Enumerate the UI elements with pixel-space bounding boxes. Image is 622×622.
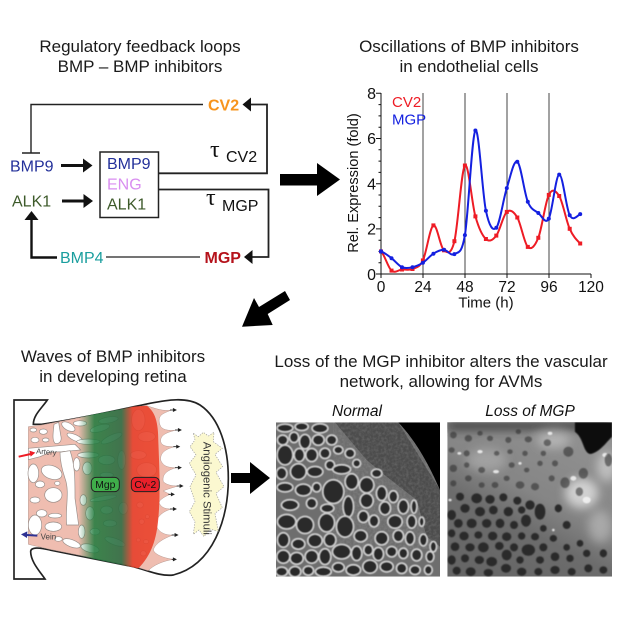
title: loss of MGP: network, allowing for AVMs [340,372,542,391]
label: Mgp [91,477,119,492]
x tick labels: 48 [456,279,474,296]
label: Vein: Vein [41,533,56,542]
arrow: BMP4 to ALK1 [24,211,57,258]
x tick labels: 24 [414,279,432,296]
series: MGP [379,128,582,269]
label: tau MGP: τ [206,185,216,211]
arrow: big right to chart [280,163,340,196]
y tick labels: 0 [367,267,376,284]
legend: CV2: CV2 [392,94,421,111]
title: waves of BMP inhibitors: in developing retina [39,367,187,386]
micrograph: loss of MGP vasculature [447,422,617,577]
line MGP to BMP4 [106,256,200,258]
arrow: retina to micrographs [231,462,270,494]
x tick labels: 120 [578,279,604,296]
label: tau MGP [206,185,258,215]
sprout arrows [168,409,183,561]
Mgp and Cv-2 expression gradient [77,403,162,573]
title: regulatory feedback loops: Regulatory feedback loops [39,37,241,56]
heading: Normal: Normal [332,403,383,420]
micrograph: normal vasculature [276,422,440,577]
x tick labels [377,279,604,296]
label: tau CV2: τ [210,137,220,163]
label: ALK1: ALK1 [12,194,51,210]
diagram: developing retina [14,400,228,579]
x tick labels: 0 [377,279,386,296]
arrow: big down-left to retina [242,291,290,327]
inhibition line CV2 to BMP9 [22,104,203,153]
label: MGP: MGP [204,250,241,267]
title: oscillations: in endothelial cells [400,57,538,76]
heading: Loss of MGP: Loss of MGP [485,403,575,420]
label: BMP9: BMP9 [10,158,54,176]
y tick labels: 8 [367,86,376,103]
title: loss of MGP: Loss of the MGP inhibitor alters the vascular [274,352,608,371]
panel: feedback loop diagram [10,98,268,267]
y tick labels: 6 [367,131,376,148]
retina outline [14,400,228,579]
y tick labels [367,86,376,284]
series: CV2 [379,164,582,273]
y tick labels: 2 [367,222,376,238]
arrow: ALK1 to complex [62,194,93,208]
label: tau CV2: CV2 [226,149,257,166]
label: Cv-2: Cv-2 [134,480,156,491]
vascular plexus [28,406,178,571]
x tick labels: 72 [498,279,516,296]
arrow: vein flow [21,531,37,538]
receptor complex box: ALK1 [107,196,146,214]
title: regulatory feedback loops: BMP – BMP inhibitors [58,57,222,76]
receptor complex box: ENG [107,176,142,194]
arrow: delay to MGP [159,190,268,264]
label: tau CV2 [210,137,257,166]
arrow: artery flow [19,451,35,457]
line chart: relative expression over time [346,86,604,312]
legend: MGP: MGP [392,112,426,128]
label: CV2: CV2 [208,98,239,114]
angiogenic stimuli star [189,432,224,537]
x tick labels: 96 [540,279,558,296]
label: Mgp: Mgp [95,480,116,491]
title: waves of BMP inhibitors: Waves of BMP inhibitors [21,347,205,366]
receptor complex box [100,152,158,218]
x axis title: Time (h) [458,294,514,312]
label: Cv-2 [131,477,159,492]
y axis title: Rel. Expression (fold) [346,113,362,253]
label: BMP4: BMP4 [60,250,104,267]
label: tau MGP: MGP [222,198,258,215]
title: oscillations: Oscillations of BMP inhibitors [359,37,579,56]
angiogenic stimuli star: Angiogenic Stimuli [200,442,212,535]
vertical time lines [423,93,549,274]
receptor complex box: BMP9 [107,156,151,173]
label: Artery: Artery [36,447,57,457]
axes [376,93,591,278]
arrow: delay to CV2 [159,98,267,173]
y tick labels: 4 [367,176,376,194]
arrow: BMP9 to complex [61,158,92,172]
